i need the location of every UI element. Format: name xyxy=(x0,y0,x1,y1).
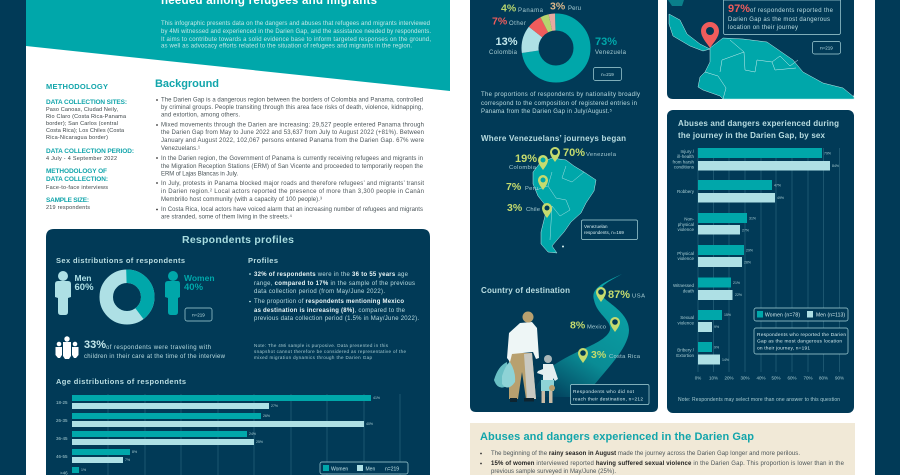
nationality donut: 73% xyxy=(595,36,617,48)
profiles text: Profiles xyxy=(248,256,278,265)
bar chart: 80% xyxy=(819,376,828,380)
intro text: by 4Mi witnessed and experienced in the Darien Gap, and the assistance needed by respondents. xyxy=(161,29,431,35)
methodology column xyxy=(46,82,134,211)
country of destination: USA xyxy=(632,294,645,300)
background section: Mixed movements through the Darien are increasing: 29,527 people entered Panama through xyxy=(161,122,424,128)
bar chart: Non- xyxy=(684,216,694,222)
children statistic xyxy=(84,339,226,360)
legend: n=219 xyxy=(385,466,399,472)
age bar chart: 36-45 xyxy=(56,436,68,441)
nationality note: Panama from the Darien Gap in July/August.⁵ xyxy=(481,108,612,115)
country of destination: Costa Rica xyxy=(609,354,641,360)
legend: Men (n=113) xyxy=(816,312,845,318)
background section: In July, protests in Panama blocked major roads and therefore refugees’ and migrants’ transit xyxy=(161,181,424,187)
sex distribution chart: 40% xyxy=(184,282,204,293)
panel: abuses and dangers text xyxy=(470,423,855,475)
bar chart: Physical xyxy=(677,251,694,256)
nationality donut: Panama xyxy=(518,8,544,14)
age bar chart: 7% xyxy=(125,458,130,462)
icon: pin Costa Rica xyxy=(578,348,588,363)
bar chart: 50% xyxy=(771,376,781,380)
age bar chart: 41% xyxy=(373,396,380,400)
nationality donut: 3% xyxy=(550,0,566,12)
profiles text xyxy=(248,256,419,322)
callout: 97%: Darien Gap as the most dangerous xyxy=(728,17,830,23)
journeys map: Chile xyxy=(526,207,540,213)
panel heading: the journey in the Darien Gap, by sex xyxy=(678,131,826,140)
country of destination xyxy=(481,274,649,404)
bar chart: violence xyxy=(677,256,694,261)
panel: abuses by sex xyxy=(667,110,854,413)
bar chart: 21% xyxy=(733,281,740,285)
age bar chart: 24% xyxy=(249,432,256,436)
nationality donut: 4% xyxy=(501,2,517,14)
profiles text: previous data collection period (1.5% in May/June 2022). xyxy=(254,316,419,322)
methodology column: SAMPLE SIZE: xyxy=(46,197,89,204)
panel: abuses and dangers text: previous sample surveyed in May/June (25%). xyxy=(491,469,616,475)
chart caption: Respondents who reported the Darien xyxy=(757,332,846,338)
destination caption: Respondents who did not xyxy=(573,389,635,395)
journeys map xyxy=(481,134,638,253)
methodology column: Rica-Nicaragua border) xyxy=(46,135,108,141)
methodology column: DATA COLLECTION PERIOD: xyxy=(46,148,134,155)
note: snapshot cannot therefore be considered as representative of the xyxy=(254,349,406,354)
bar chart: Bribery / xyxy=(677,348,695,352)
journeys map: 19% xyxy=(515,153,537,165)
note: mixed migration dynamics through the Darien Gap xyxy=(254,355,372,360)
callout: 97%: 97% xyxy=(728,3,750,15)
callout: 97%: of respondents reported the xyxy=(750,8,834,14)
nationality donut: n=219 xyxy=(601,72,614,77)
icon: family xyxy=(56,336,78,359)
bar chart: violence xyxy=(677,227,694,232)
intro text: as well as advocacy efforts related to the situation of refugees and migrants in the region. xyxy=(161,44,412,50)
icon: man xyxy=(55,271,71,315)
panel: nationality, journeys and destination xyxy=(470,0,658,412)
background section: Membrillo host community (with a capacity of 100 people).³ xyxy=(161,197,322,203)
bar chart: 49% xyxy=(777,196,784,200)
bar chart: 14% xyxy=(722,358,729,362)
journeys map: Peru xyxy=(525,186,538,192)
icon: pin Chile xyxy=(542,203,552,218)
background section: are stranded, some of them living in the streets.⁴ xyxy=(161,214,292,220)
bar chart: 30% xyxy=(740,376,750,380)
bar chart: 9% xyxy=(714,346,719,350)
bar chart: 0% xyxy=(695,376,701,380)
background section: Venezuelans.¹ xyxy=(161,146,200,152)
legend xyxy=(320,462,408,474)
sex distribution chart xyxy=(55,256,215,321)
destination caption: reach their destination, n=212 xyxy=(573,396,643,402)
bar chart: 28% xyxy=(744,260,751,264)
age bar chart: 26% xyxy=(263,414,270,418)
background section: in Darien region.² Local actors reported the presence of more than 3,300 people in Canàn xyxy=(161,189,424,195)
nationality note xyxy=(481,92,640,115)
intro text: This infographic presents data on the dangers and abuses that refugees and migrants interviewed xyxy=(161,21,430,27)
legend: Men xyxy=(366,466,375,472)
bar chart: 60% xyxy=(787,376,797,380)
age bar chart: 46-55 xyxy=(56,454,68,459)
panel heading: Respondents profiles xyxy=(182,234,294,246)
panel: most dangerous location map xyxy=(667,0,854,99)
background section: In Costa Rica, local actors have voiced alarm that an increasing number of refugees and migrants xyxy=(161,207,423,213)
methodology column: METHODOLOGY xyxy=(46,82,108,91)
chart caption xyxy=(754,328,848,354)
nationality donut: 13% xyxy=(496,36,518,48)
methodology column: Costa Rica); Los Chiles (Costa xyxy=(46,128,125,134)
profiles text: data collection period (from May/June 2022). xyxy=(254,289,385,295)
nationality donut: Venezuela xyxy=(595,50,627,56)
bar chart: death xyxy=(683,288,694,294)
note: Note: The 4Mi sample is purposive. Data presented in this xyxy=(254,343,389,348)
age bar chart: 40% xyxy=(366,422,373,426)
journeys map: Venezuela xyxy=(586,152,617,158)
nationality donut: 7% xyxy=(492,16,508,28)
bar chart: 70% xyxy=(803,376,813,380)
icon: pin Peru xyxy=(538,175,548,190)
bar chart: 90% xyxy=(835,376,844,380)
age bar chart: 26-35 xyxy=(56,418,68,423)
bar chart: 10% xyxy=(709,376,718,380)
panel: respondents profiles xyxy=(46,229,430,475)
callout: 97%: location on their journey xyxy=(728,25,798,31)
sex distribution chart: Men xyxy=(74,273,92,283)
bar chart xyxy=(672,148,844,380)
bar chart: 31% xyxy=(749,216,756,220)
bar chart: from harsh xyxy=(672,160,694,164)
bar chart: 9% xyxy=(714,325,719,329)
methodology column: Paso Canoas, Ciudad Neily, xyxy=(46,107,118,113)
bar chart: violence xyxy=(677,320,694,326)
journeys map: 70% xyxy=(563,147,585,159)
profiles text: 32% of respondents were in the 36 to 55 years age xyxy=(254,272,409,278)
sex distribution chart: 60% xyxy=(74,282,94,293)
bar chart: 15% xyxy=(724,313,731,317)
journeys map: 3% xyxy=(507,202,523,214)
bar chart: 47% xyxy=(774,184,781,188)
panel heading: Abuses and dangers experienced during xyxy=(678,119,839,128)
bar chart: 20% xyxy=(724,376,734,380)
country of destination: 3% xyxy=(591,349,607,361)
background section: the Darien Gap from May to June 2022 and 53,637 from July to August 2022 (+81%). Between xyxy=(161,130,424,136)
methodology column: METHODOLOGY OF xyxy=(46,168,107,175)
country of destination: Country of destination xyxy=(481,286,570,295)
bar chart: 79% xyxy=(824,152,831,156)
nationality donut: Peru xyxy=(568,6,581,12)
note xyxy=(254,343,406,360)
age bar chart: 8% xyxy=(132,450,137,454)
bar chart: ill-health xyxy=(677,154,694,159)
panel heading xyxy=(678,119,839,140)
panel: most dangerous location map: n=219 xyxy=(820,46,833,50)
country of destination: Mexico xyxy=(587,324,606,330)
chart caption: Gap as the most dangerous location xyxy=(757,338,842,344)
sex distribution chart: Women xyxy=(184,273,215,283)
header banner xyxy=(26,0,450,91)
map: South America xyxy=(533,158,596,253)
icon: pin Colombia xyxy=(538,155,548,170)
methodology column: 219 respondents xyxy=(46,205,90,211)
nationality donut xyxy=(489,0,627,80)
bar chart: 29% xyxy=(746,248,753,252)
journeys map: 7% xyxy=(506,181,522,193)
profiles text: The proportion of respondents mentioning Mexico xyxy=(254,299,404,305)
road xyxy=(530,274,629,397)
nationality donut: Other xyxy=(509,21,526,27)
sex distribution chart: Sex distributions of respondents xyxy=(56,256,185,265)
icon: red pin Darien Gap xyxy=(701,22,719,48)
methodology column: 4 July - 4 September 2022 xyxy=(46,156,117,162)
country of destination: 8% xyxy=(570,320,586,332)
background section: and extortion, among others. xyxy=(161,112,240,118)
journeys map: Colombia xyxy=(509,165,537,171)
icon: pin Venezuela xyxy=(550,147,560,162)
section heading: Abuses and dangers experienced in the Darien Gap xyxy=(480,431,754,443)
sex distribution chart: n=219 xyxy=(192,312,205,318)
nationality note: The proportions of respondents by nationality broadly xyxy=(481,92,640,98)
illustration: adult with child xyxy=(494,312,558,403)
methodology column: border); San Carlos (central xyxy=(46,121,118,127)
methodology column: DATA COLLECTION: xyxy=(46,176,108,183)
age bar chart: 1% xyxy=(81,468,86,472)
age bar chart: 27% xyxy=(271,404,278,408)
legend: Women xyxy=(331,466,348,472)
profiles text: as destination is increasing (8%), compared to the xyxy=(254,308,406,314)
bar chart: 40% xyxy=(756,376,766,380)
background section: the Migration Reception Stations (ERM) of San Vicente and proceeded to temporarily reopen the xyxy=(161,164,424,170)
panel: abuses and dangers text: The beginning of the rainy season in August made the journey across the Darien Gap longer and more perilous. xyxy=(491,451,800,457)
background section: In the Darien region, the Government of Panama is currently receiving refugees and migrants in xyxy=(161,156,423,162)
background section: January and August 2022, 102,067 persons entered Panama from the Darien Gap. 67% were xyxy=(161,138,425,144)
bar chart: conditions xyxy=(674,164,695,170)
bar chart: 22% xyxy=(735,293,742,297)
methodology column: Face-to-face interviews xyxy=(46,185,108,191)
bar chart: Witnessed xyxy=(673,283,694,288)
bar chart: Sexual xyxy=(680,315,694,320)
children statistic: children in their care at the time of the interview xyxy=(84,354,226,360)
bar chart: physical xyxy=(678,222,694,227)
intro text: It aims to contribute towards a solid evidence base to inform targeted responses on the ground, xyxy=(161,37,431,43)
bar chart: 27% xyxy=(742,228,749,232)
intro text xyxy=(161,21,431,50)
country of destination: 87% xyxy=(608,289,630,301)
legend xyxy=(754,308,848,321)
background section: Background xyxy=(155,78,219,90)
bar chart: Injury / xyxy=(680,149,695,154)
destination caption xyxy=(570,384,649,404)
background section: ERM of Lajas Blancas in July. xyxy=(161,172,238,178)
nationality note: correspond to the composition of registered entries in xyxy=(481,101,637,107)
nationality donut: Colombia xyxy=(489,50,518,56)
age bar chart: 18-25 xyxy=(56,400,68,405)
icon: pin Mexico xyxy=(610,317,620,332)
icon: pin USA xyxy=(596,287,606,302)
panel: abuses and dangers text: 15% of women interviewed reported having suffered sexual violence in the Darien Gap. This proportion is lower than in the xyxy=(491,461,845,467)
children statistic: 33% xyxy=(84,339,106,351)
background section xyxy=(155,78,425,220)
bar chart: Extortion xyxy=(676,353,694,358)
map: Central and South America xyxy=(668,0,854,99)
children statistic: of respondents were traveling with xyxy=(106,345,211,351)
journeys map: Where Venezuelans’ journeys began xyxy=(481,134,626,143)
age bar chart: 25% xyxy=(256,440,263,444)
icon: woman xyxy=(165,271,180,315)
map caption xyxy=(582,220,638,240)
age bar chart: Age distributions of respondents xyxy=(56,377,186,386)
bar chart: 84% xyxy=(832,164,839,168)
bar chart: Robbery xyxy=(677,189,695,194)
callout: 97% xyxy=(724,0,840,34)
chart note: Note: Respondents may select more than one answer to this question xyxy=(678,397,840,403)
map caption: Venezuelan xyxy=(584,224,608,229)
background section: by criminal groups. People transiting through this area face risks of death, violence, kidnapping, xyxy=(161,105,423,111)
methodology column: DATA COLLECTION SITES: xyxy=(46,99,127,106)
methodology column: Rio Claro (Costa Rica-Panama xyxy=(46,114,127,120)
background section: The Darien Gap is a dangerous region between the borders of Colombia and Panama, controlled xyxy=(161,98,423,104)
profiles text: range, compared to 17% in the sample of the previous xyxy=(254,281,415,287)
map caption: respondents, n=169 xyxy=(584,230,624,235)
age bar chart xyxy=(56,377,408,475)
chart caption: on their journey, n=191 xyxy=(757,346,810,352)
legend: Women (n=78) xyxy=(765,312,800,318)
